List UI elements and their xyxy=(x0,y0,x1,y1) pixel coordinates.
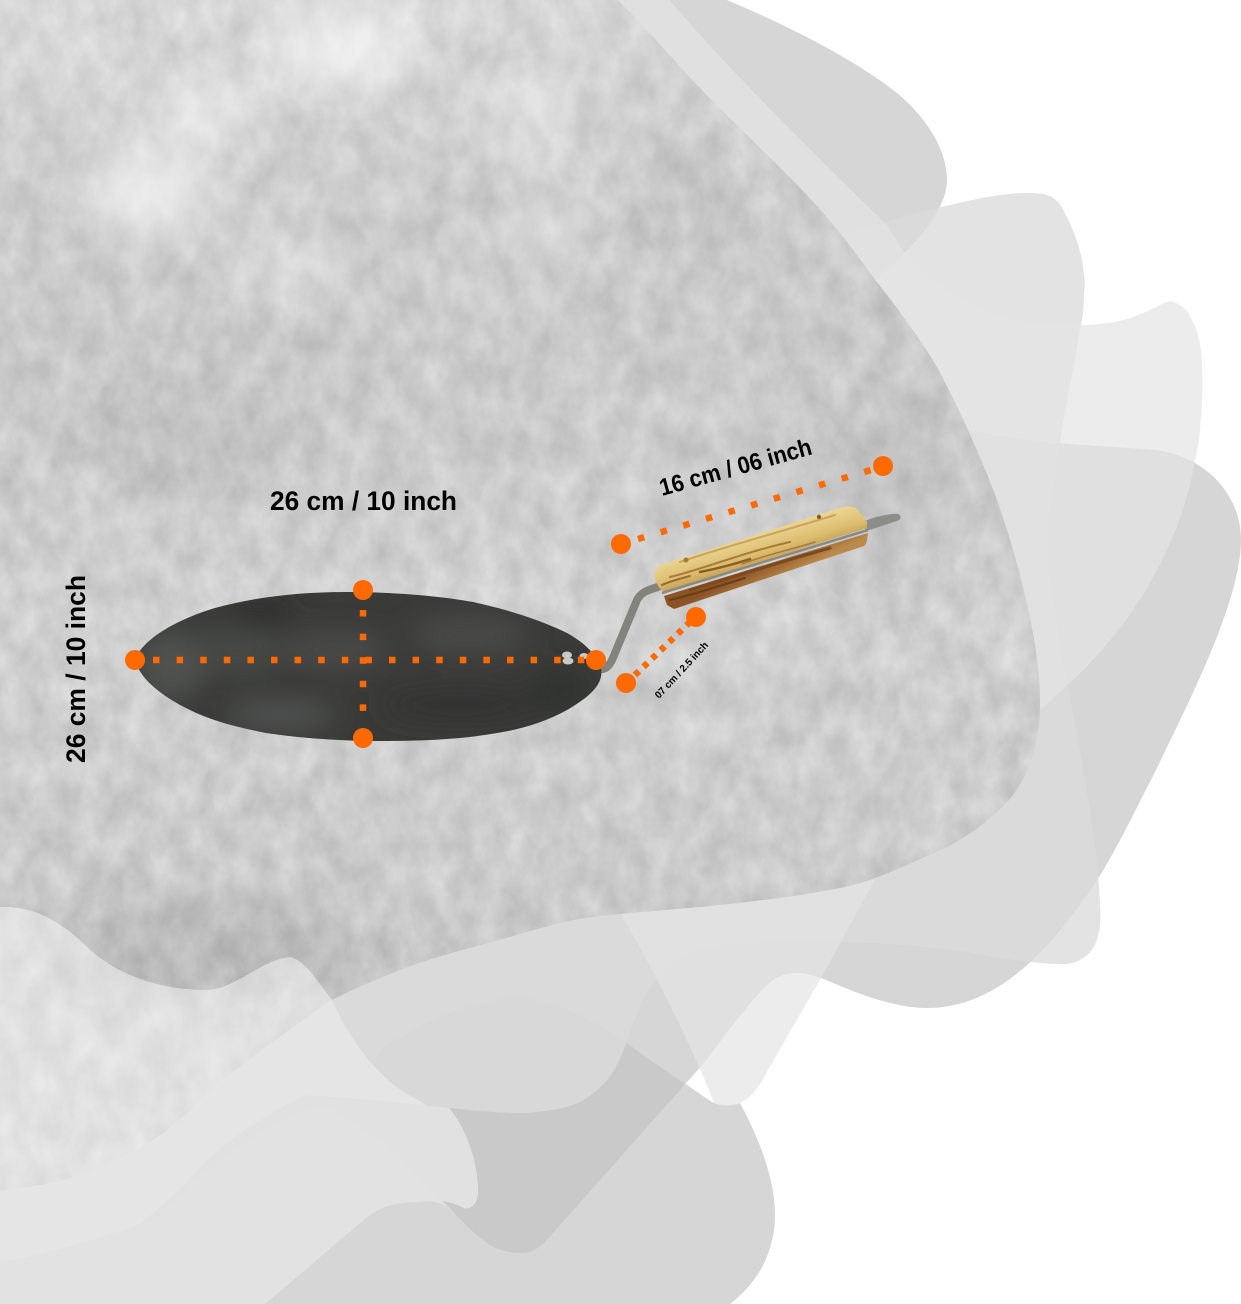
handle: lower wood half xyxy=(664,533,868,609)
measurement: handle offset dotted line xyxy=(616,607,706,693)
handle: upper wood half xyxy=(655,507,867,592)
measurement: pan height dotted line xyxy=(353,580,373,748)
measurement: pan width dotted line xyxy=(125,650,606,670)
background wave: pale lower-left sweep xyxy=(0,1000,478,1304)
product: griddle pan with handle xyxy=(135,507,901,741)
label: handle offset: 07 cm / 2.5 inch xyxy=(653,640,711,701)
measurement: handle length dotted line xyxy=(611,456,893,554)
label: pan width: 26 cm / 10 inch xyxy=(270,486,457,516)
background wave: bottom lobe xyxy=(265,998,775,1304)
handle: steel centre strip xyxy=(662,530,868,593)
background wave: dark top-right lobe xyxy=(600,0,947,280)
handle: wood grain xyxy=(662,515,835,600)
handle: steel hanging tip xyxy=(864,514,901,531)
background wave: lower-left front fold xyxy=(0,1108,449,1304)
background wave: pale middle shape xyxy=(0,193,1100,1262)
pan rivets xyxy=(562,652,588,664)
label: handle length: 16 cm / 06 inch xyxy=(656,434,815,502)
background wave: lightest band with right and lower lobes xyxy=(500,0,1202,1105)
handle: steel stem xyxy=(597,587,658,669)
pan body xyxy=(135,592,601,741)
background wave: translucent veil over lower-left stone xyxy=(0,907,332,1210)
background wave: lower-left inner fold xyxy=(0,1095,478,1304)
label: pan height: 26 cm / 10 inch xyxy=(61,575,91,763)
panel: textured stone surface xyxy=(0,0,1040,1191)
background wave: large right and lower lobe xyxy=(300,430,1241,1253)
